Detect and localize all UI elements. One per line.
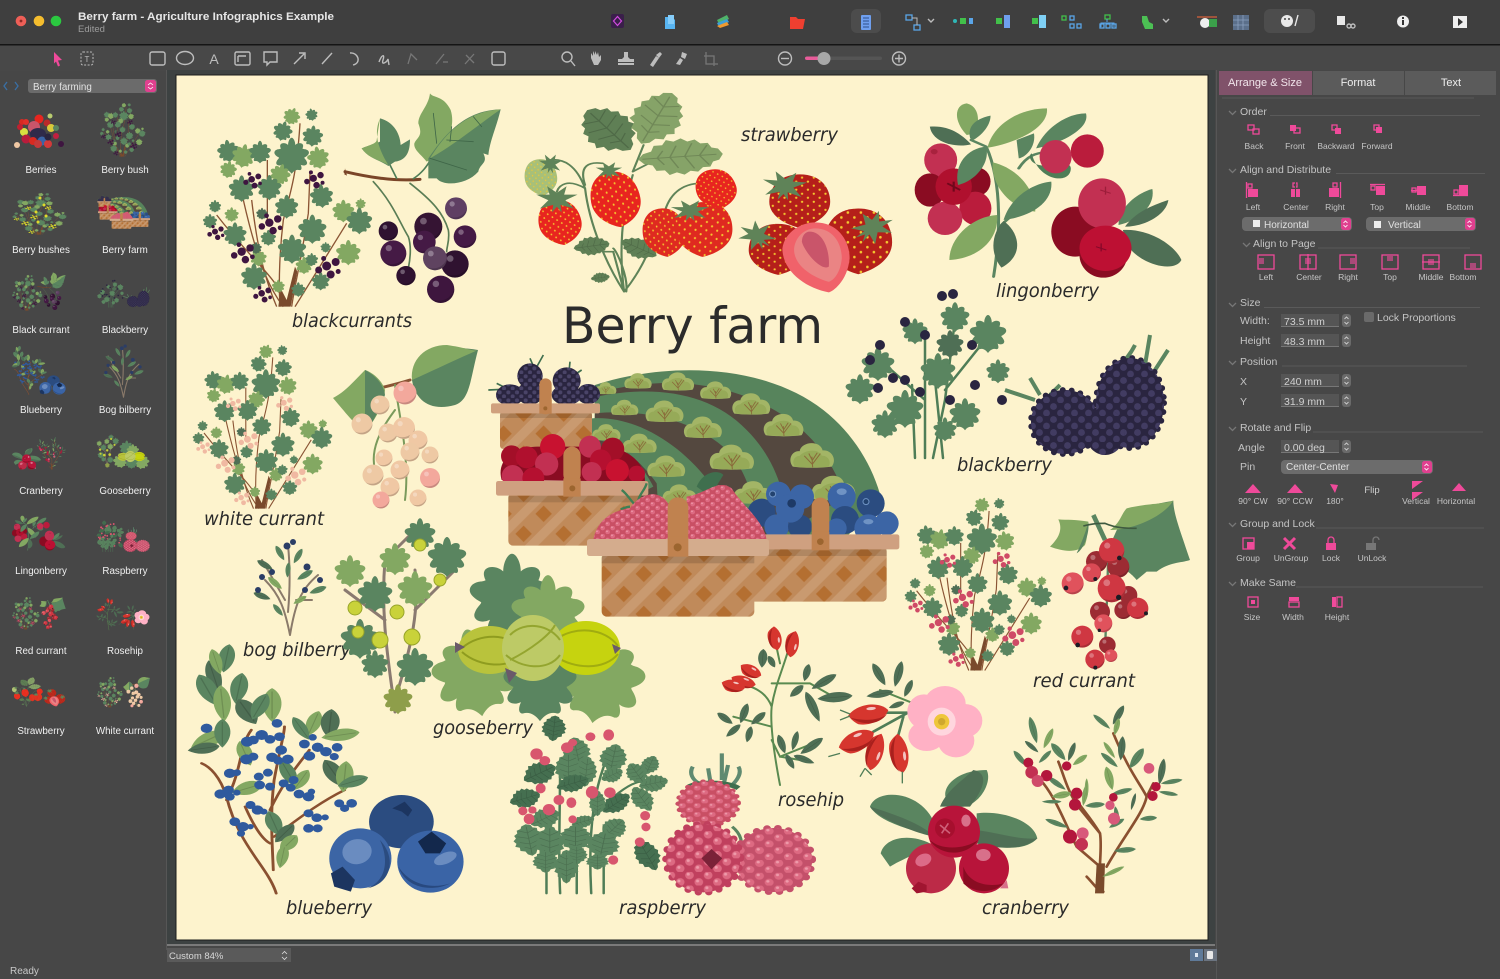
section: align and distribute: Horizontal <box>1264 220 1309 231</box>
basket: cranberries <box>496 434 648 546</box>
illustration: blackberry <box>846 289 1168 458</box>
field rows <box>592 370 882 537</box>
field bushes <box>592 372 855 504</box>
left library sidebar <box>4 70 167 950</box>
thumbnail: Lingonberry <box>12 516 65 551</box>
section: align and distribute: Align and Distribute <box>1240 164 1331 176</box>
illustration: blueberry <box>187 643 464 893</box>
title: Berry farm <box>562 297 823 355</box>
section: order: Forward <box>1361 141 1393 151</box>
illustration: bog bilberry <box>253 539 327 635</box>
canvas surround <box>167 70 1215 944</box>
section: size: Lock Proportions <box>1377 312 1456 324</box>
tabs <box>1219 71 1496 98</box>
section: size: Size <box>1240 297 1261 309</box>
thumbnail: Berries <box>14 114 64 148</box>
left library sidebar: Berry farming <box>33 82 92 93</box>
thumbnail: Blackberry <box>97 280 150 307</box>
section: align and distribute <box>1229 164 1485 231</box>
left library sidebar: Lingonberry <box>15 566 67 577</box>
thumbnail: Gooseberry <box>97 434 151 471</box>
thumbnail: Strawberry <box>12 676 66 706</box>
section: make same: Make Same <box>1240 577 1296 589</box>
section: align to page: Bottom <box>1450 272 1476 282</box>
section: rotate and flip: Pin <box>1240 461 1255 473</box>
section: rotate and flip: 180° <box>1326 496 1344 506</box>
section: position: 240 mm <box>1284 376 1322 388</box>
label: cranberry: cranberry <box>982 897 1070 919</box>
main toolbar icons <box>611 9 1467 33</box>
tool strip: A <box>209 51 219 67</box>
section: align and distribute: Vertical <box>1388 220 1421 231</box>
section: make same <box>1229 577 1483 622</box>
thumbnail: White currant <box>97 676 150 707</box>
left library sidebar: Berry bush <box>101 165 149 176</box>
section: align and distribute: Bottom <box>1447 202 1473 212</box>
thumbnail: Berry farm <box>97 195 150 229</box>
label: white currant: white currant <box>204 508 325 530</box>
basket: blackberries <box>488 355 600 449</box>
section: rotate and flip: 90° CW <box>1238 496 1268 506</box>
left library sidebar: Strawberry <box>17 726 65 737</box>
section: group and lock <box>1229 518 1484 563</box>
thumbnail: Cranberry <box>12 437 66 470</box>
section: align to page: Middle <box>1418 272 1444 282</box>
section: make same: Size <box>1244 612 1261 622</box>
section: rotate and flip: Vertical <box>1402 496 1430 506</box>
section: align to page: Top <box>1383 272 1397 282</box>
label: gooseberry: gooseberry <box>433 717 534 739</box>
section: align to page: Right <box>1338 272 1359 282</box>
left library sidebar: Gooseberry <box>99 486 151 497</box>
title bar: Berry farm - Agriculture Infographics Example <box>78 11 334 23</box>
section: align to page: Left <box>1259 272 1274 282</box>
section: group and lock: UnGroup <box>1274 553 1309 563</box>
thumbnail: Berry bush <box>100 102 146 157</box>
illustration: gooseberry <box>335 518 652 731</box>
label: red currant: red currant <box>1033 670 1136 692</box>
illustration: blackcurrants <box>203 93 501 307</box>
illustration: strawberry <box>523 85 900 292</box>
right inspector panel <box>1215 70 1500 979</box>
section: group and lock: Group and Lock <box>1240 518 1315 530</box>
left library sidebar: Berries <box>25 165 57 176</box>
section: position <box>1229 356 1467 408</box>
illustration: white currant <box>193 342 478 509</box>
tabs: Text <box>1441 77 1461 89</box>
title bar <box>0 0 1500 46</box>
section: size <box>1229 297 1480 348</box>
illustration: rosehip <box>715 626 982 785</box>
section: align and distribute: Right <box>1325 202 1346 212</box>
basket: blueberries <box>747 482 899 602</box>
illustration: berry farm baskets <box>488 355 899 617</box>
illustration: lingonberry <box>915 103 1181 278</box>
section: order <box>1229 106 1480 151</box>
tool strip: T <box>85 55 90 64</box>
section: rotate and flip: Center-Center <box>1286 462 1350 473</box>
thumbnail: Raspberry <box>96 520 149 552</box>
section: rotate and flip: Horizontal <box>1437 496 1475 506</box>
canvas page <box>176 75 1208 940</box>
section: align and distribute: Center <box>1283 202 1309 212</box>
left library sidebar: Bog bilberry <box>99 405 151 416</box>
section: rotate and flip: Flip <box>1364 485 1380 496</box>
section: align to page: Center <box>1296 272 1322 282</box>
label: strawberry: strawberry <box>741 124 839 146</box>
label: blackberry: blackberry <box>957 454 1053 476</box>
section: align and distribute: Top <box>1370 202 1384 212</box>
section: size: 48.3 mm <box>1284 336 1325 348</box>
thumbnail: Berry bushes <box>12 192 67 235</box>
label: blueberry: blueberry <box>286 897 373 919</box>
left library sidebar: Blackberry <box>102 325 148 336</box>
thumbnail: Bog bilberry <box>103 344 144 397</box>
section: make same: Width <box>1282 612 1304 622</box>
left library sidebar: Black currant <box>12 325 70 336</box>
illustration: raspberry <box>506 715 812 893</box>
section: group and lock: Lock <box>1322 553 1341 563</box>
label: blackcurrants: blackcurrants <box>292 310 412 332</box>
status bar: Custom 84% <box>169 951 224 962</box>
section: position: Position <box>1240 356 1278 368</box>
status bar: Ready <box>10 966 39 977</box>
label: raspberry: raspberry <box>619 897 707 919</box>
illustration: cranberry <box>870 704 1183 893</box>
section: rotate and flip: 0.00 deg <box>1284 442 1325 454</box>
tabs: Format <box>1341 77 1375 89</box>
section: size: Height <box>1240 335 1270 347</box>
left library sidebar: Cranberry <box>19 486 63 497</box>
section: position: Y <box>1240 396 1247 408</box>
label: lingonberry: lingonberry <box>996 280 1100 302</box>
illustration: red currant <box>905 495 1190 670</box>
left library sidebar: Berry bushes <box>12 245 70 256</box>
left library sidebar: White currant <box>96 726 154 737</box>
section: size: Width: <box>1240 315 1270 327</box>
section: rotate and flip: Angle <box>1238 442 1265 454</box>
section: position: X <box>1240 376 1247 388</box>
label: bog bilberry: bog bilberry <box>243 639 352 661</box>
status bar <box>10 944 1217 977</box>
section: align to page: Align to Page <box>1253 238 1316 250</box>
tabs: Arrange & Size <box>1228 77 1302 89</box>
section: group and lock: UnLock <box>1358 553 1387 563</box>
section: size: 73.5 mm <box>1284 316 1325 328</box>
basket: raspberries <box>587 483 769 617</box>
section: rotate and flip <box>1229 422 1483 506</box>
section: order: Backward <box>1317 141 1355 151</box>
tool strip <box>0 46 1500 70</box>
section: rotate and flip: 90° CCW <box>1277 496 1313 506</box>
section: align and distribute: Middle <box>1405 202 1431 212</box>
section: position: 31.9 mm <box>1284 396 1325 408</box>
section: order: Front <box>1285 141 1306 151</box>
thumbnail: Rosehip <box>96 598 149 630</box>
left library sidebar: Red currant <box>15 646 67 657</box>
left library sidebar: Raspberry <box>102 566 148 577</box>
section: align and distribute: Left <box>1246 202 1261 212</box>
section: align to page <box>1243 238 1481 282</box>
left library sidebar: Blueberry <box>20 405 62 416</box>
thumbnail: Black currant <box>12 272 66 311</box>
section: group and lock: Group <box>1236 553 1260 563</box>
section: order: Order <box>1240 106 1267 118</box>
section: order: Back <box>1245 141 1264 151</box>
left library sidebar: Rosehip <box>107 646 144 657</box>
label: rosehip: rosehip <box>778 789 844 811</box>
thumbnail: Red currant <box>12 597 66 629</box>
left library sidebar: Berry farm <box>102 245 148 256</box>
section: rotate and flip: Rotate and Flip <box>1240 422 1311 434</box>
title bar: Edited <box>78 24 105 35</box>
thumbnail: Blueberry <box>11 346 66 395</box>
section: make same: Height <box>1325 612 1350 622</box>
